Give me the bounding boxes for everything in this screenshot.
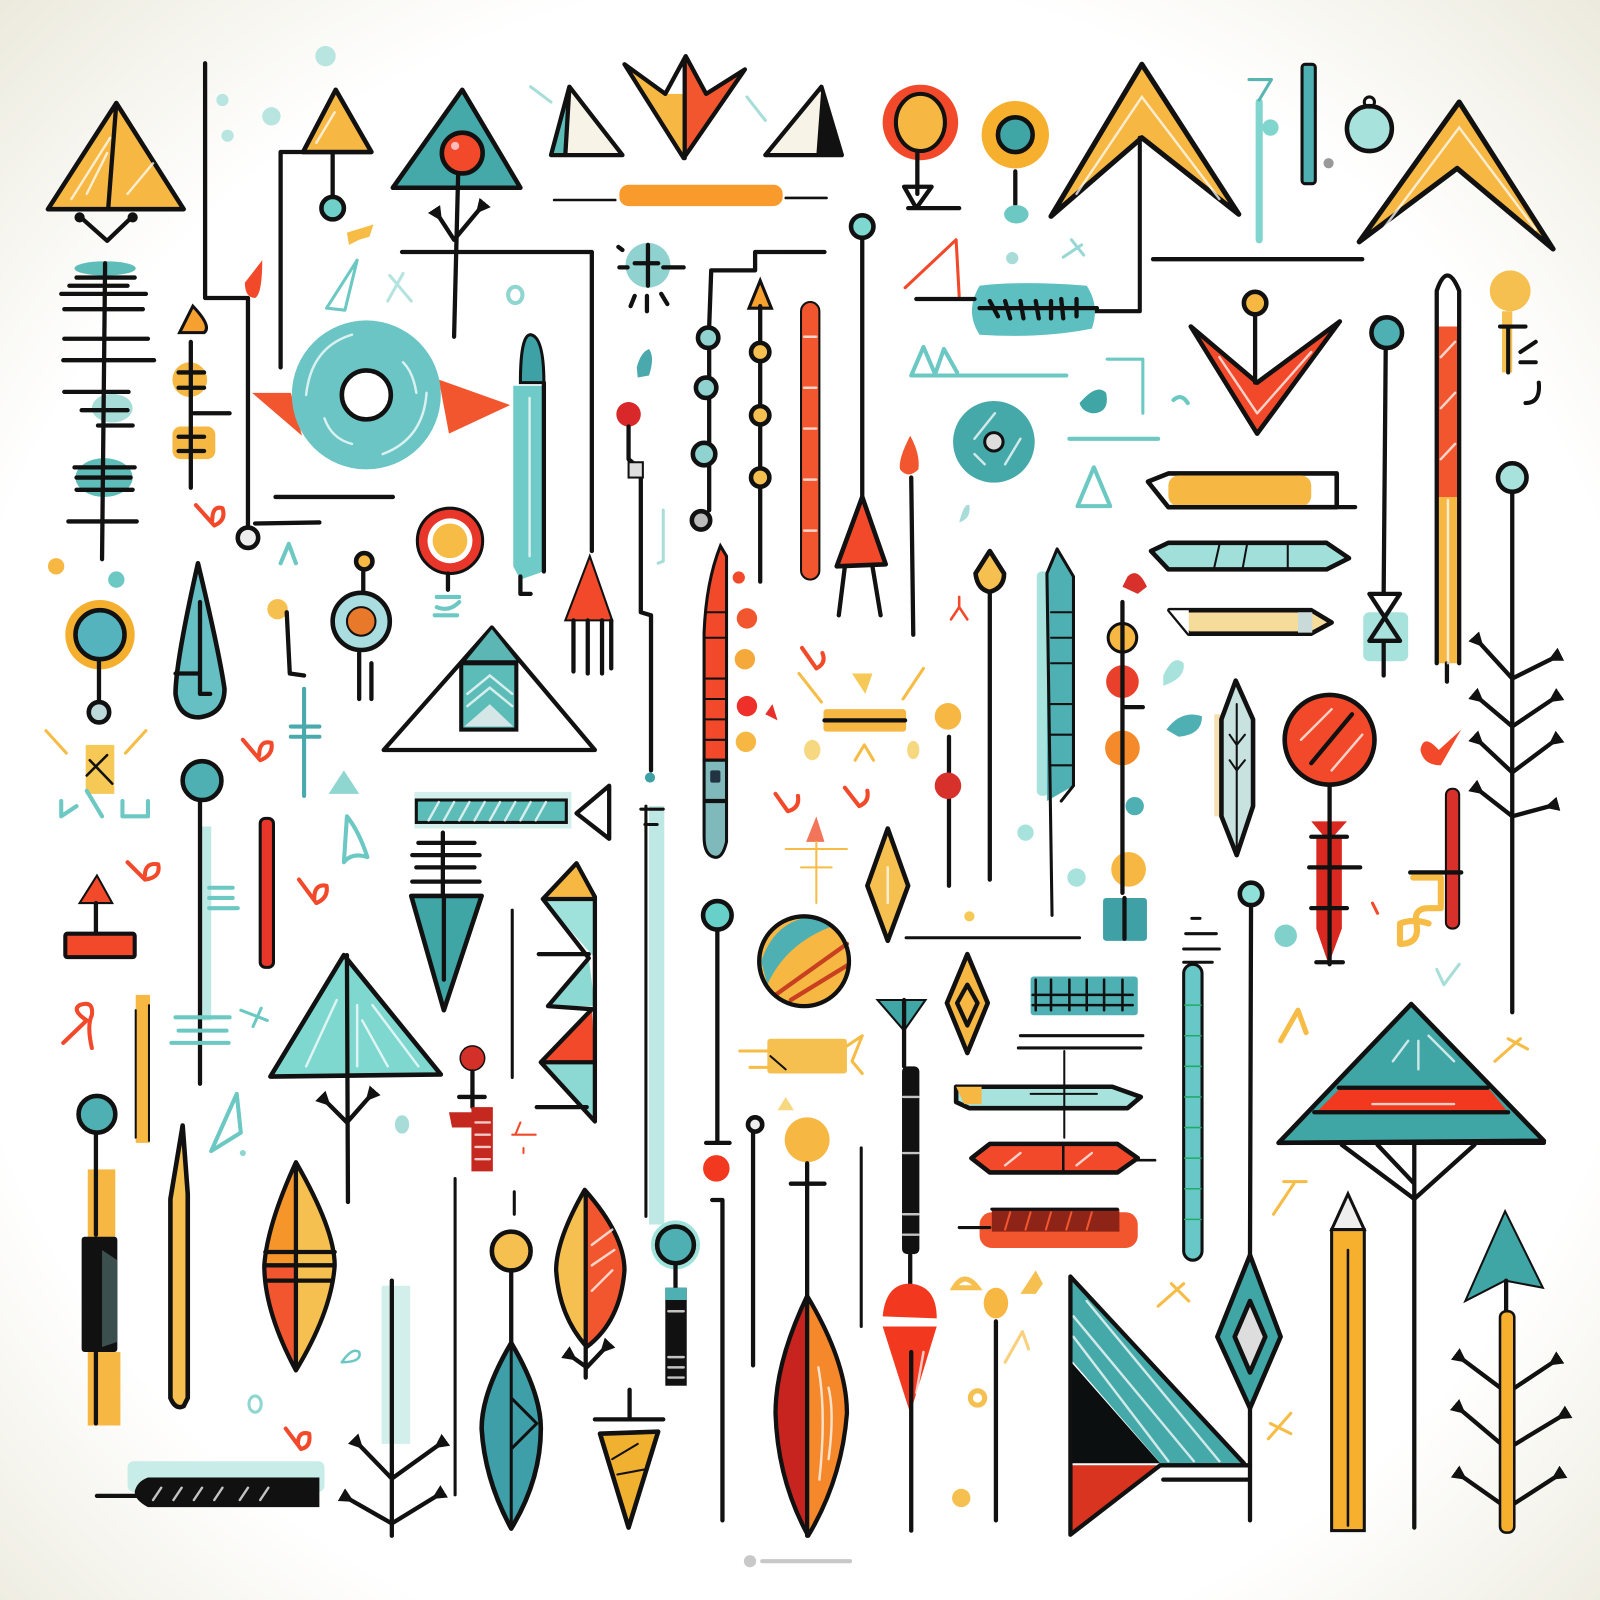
flame arrow with yellow blobs: [172, 306, 230, 488]
teal triangle with red ball arrow: [393, 90, 592, 551]
yellow triangle with chevron: [48, 103, 184, 241]
teal grid: [1031, 977, 1138, 1015]
horizontal lines: [906, 938, 1143, 1048]
black bar with teal shadow: [97, 1461, 324, 1507]
small teal triangles: [281, 544, 367, 862]
yellow dot teal cross line: [267, 599, 319, 796]
teal donut small: [953, 401, 1035, 483]
teal triangle small: [959, 467, 1110, 522]
teal drop: [176, 563, 224, 717]
teal outline triangle: [211, 1094, 409, 1412]
yellow node arrow column: [749, 281, 771, 582]
teal pencil with yellow end: [956, 1051, 1141, 1138]
teal leaf with yellow pin: [482, 1232, 541, 1529]
red house marker: [65, 876, 135, 957]
red squiggles: [128, 505, 327, 1449]
teal tall ladder: [1037, 549, 1073, 915]
small yellow triangle pin: [281, 90, 371, 367]
teal arrow with branches: [1461, 1211, 1561, 1533]
big yellow chevron with stem: [1020, 64, 1239, 311]
bead column: [1103, 573, 1147, 941]
teal dots middle: [964, 660, 1297, 947]
fishbone spine: [61, 261, 154, 559]
teal small marks upper: [911, 240, 1143, 413]
scattered yellow marks right: [1158, 903, 1528, 1439]
left sail triangle: [531, 87, 622, 155]
red rocket: [704, 546, 727, 857]
teal striped bar with triangle: [414, 786, 609, 839]
red tool pin: [449, 1046, 536, 1171]
red ring yellow pin: [883, 85, 959, 208]
red hatched pencil: [959, 1209, 1138, 1248]
red pin circuit: [616, 402, 663, 783]
yellow and red leaf: [556, 1190, 624, 1378]
teal swirls: [1069, 389, 1202, 737]
striped ball: [759, 916, 849, 1006]
red long bar: [801, 302, 819, 580]
teal diamond pin: [1163, 883, 1281, 1520]
circuit line with red flame: [205, 63, 393, 548]
red and yellow dots: [733, 571, 778, 752]
yellow pencil left: [170, 1126, 188, 1407]
vertical lines: [455, 910, 514, 1495]
right sail triangle: [747, 87, 842, 155]
red check and bar: [1410, 730, 1461, 929]
large triangle with house: [384, 628, 595, 750]
red ribbon mark: [63, 1004, 92, 1048]
teal blob: [637, 349, 652, 378]
yellow and teal corner dots: [48, 558, 124, 588]
teal pin with black block: [79, 1096, 120, 1426]
cream pencil horizontal: [1169, 610, 1332, 634]
teal pin with ticks: [183, 761, 238, 1084]
pins center lower: [703, 901, 762, 1520]
red bobber: [883, 1284, 937, 1531]
red arrow with legs: [565, 556, 612, 673]
teal triangle with segmented black bar: [878, 1000, 926, 1286]
small teal marks: [327, 224, 522, 310]
branching arrow pin: [1480, 463, 1553, 1012]
teal tall ladder bar: [1184, 918, 1219, 1260]
yellow pin with scatter: [952, 1270, 1043, 1520]
line beside bobber: [860, 1148, 863, 1327]
teal fishbone bar: [972, 283, 1097, 336]
teal ticks and cross: [171, 1008, 267, 1043]
red striped ball with fishbone: [1285, 695, 1374, 964]
pale teal line and glyph: [1249, 80, 1279, 240]
pale teal dots: [216, 46, 336, 142]
red ring target: [417, 508, 483, 615]
orange bar with lines: [554, 185, 827, 252]
yellow pencil horizontal: [1148, 473, 1355, 507]
teal pencil horizontal: [1151, 543, 1349, 569]
red flame pin: [900, 436, 919, 635]
teal pin with hourglass: [1363, 317, 1408, 676]
yellow and red pin: [935, 703, 961, 886]
red capsule: [1437, 276, 1459, 682]
second yellow chevron: [1153, 102, 1553, 259]
teal donut with red wings: [252, 320, 510, 469]
branch arrow with pale band: [349, 1281, 439, 1536]
zigzag triangles: [537, 863, 595, 1121]
teal node column: [692, 252, 824, 530]
yellow music glyph: [1400, 878, 1441, 944]
pale teal loop circle: [1347, 97, 1392, 151]
yellow diamond: [867, 829, 908, 941]
red pin with triangle and legs: [837, 215, 886, 615]
red pencil: [971, 1144, 1155, 1172]
yellow ring pin with scribble: [46, 600, 148, 816]
teal pen: [513, 335, 544, 594]
teal pin with black bar: [651, 1220, 700, 1386]
yellow drop pin: [976, 551, 1004, 880]
pin with orange core: [333, 553, 390, 699]
yellow bar: [136, 995, 150, 1143]
orange diamond: [264, 1162, 335, 1370]
yellow pencil right: [1332, 1194, 1364, 1531]
feather leaf: [1214, 681, 1253, 855]
long line with pale teal band: [641, 806, 664, 1224]
crown arrow: [624, 56, 745, 158]
teal tall bar: [1302, 64, 1334, 184]
yellow cross with red tip: [786, 816, 847, 903]
grey caption smudge: [744, 1555, 852, 1567]
teal triangle arrow: [270, 955, 441, 1202]
red outline triangle: [905, 240, 974, 299]
yellow bar with ribbon: [740, 1036, 862, 1110]
comb with teal arrowhead: [411, 833, 482, 1010]
teal sunburst: [618, 243, 684, 311]
scattered red marks: [776, 597, 967, 811]
red chevron with pin: [1191, 292, 1340, 434]
large striped triangle: [1279, 1004, 1544, 1528]
yellow ring teal pin: [982, 101, 1049, 223]
yellow bar with rays: [799, 668, 923, 760]
yellow key: [1490, 270, 1539, 403]
striped teal black and red triangle: [1070, 1277, 1250, 1535]
small concentric diamond: [947, 954, 988, 1053]
red and orange leaf with yellow pin: [776, 1117, 847, 1536]
yellow cone: [595, 1390, 663, 1528]
red bar: [260, 818, 273, 967]
